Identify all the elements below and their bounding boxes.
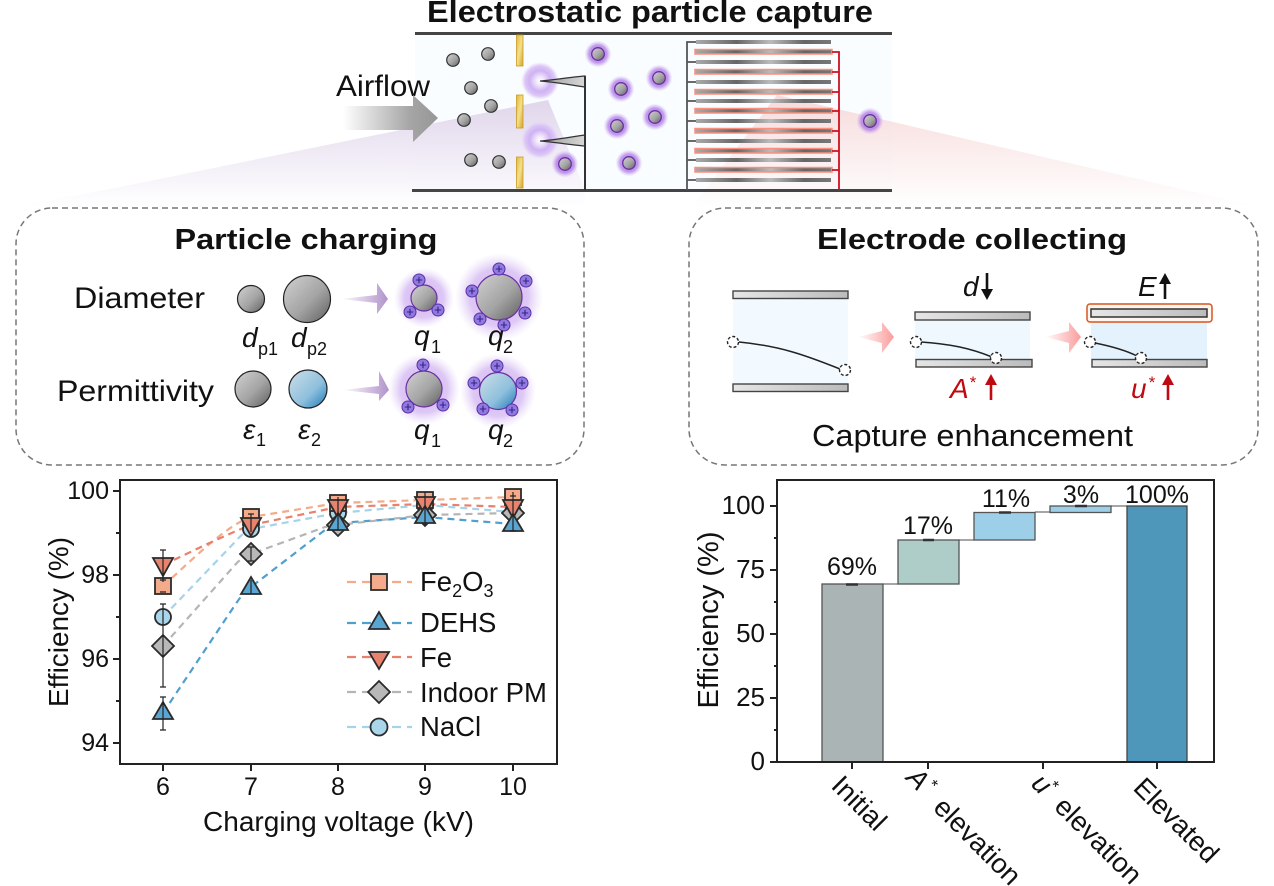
y tick labels: 50: [736, 618, 765, 648]
charged particle q1 diameter: [394, 268, 454, 328]
legend: Fe2O3: O: [462, 566, 484, 597]
legend: DEHS: [347, 607, 496, 638]
y tick labels: 98: [81, 561, 109, 589]
legend: NaCl: [347, 711, 481, 742]
heading: Particle charging: [174, 224, 438, 256]
series: Fe markers: [153, 497, 523, 576]
value labels: 69%: [827, 553, 877, 581]
legend: NaCl: NaCl: [420, 711, 481, 742]
category labels: Initial: [826, 769, 893, 837]
labels d_p1 d_p2: [242, 322, 327, 359]
labels epsilon: 2: [311, 430, 321, 450]
category labels: u: [1026, 767, 1058, 800]
label: d decrease: [963, 271, 993, 302]
value labels: 3%: [1063, 481, 1099, 509]
duct background: [415, 34, 892, 190]
series: Indoor PM markers: [152, 502, 524, 657]
category labels: *: [1044, 776, 1063, 795]
legend: Fe: [347, 642, 452, 673]
value labels: 17%: [903, 512, 953, 540]
y tick labels: [722, 490, 765, 776]
airflow label: Airflow: [336, 70, 430, 103]
labels q1 q2 row one: q: [414, 320, 430, 351]
bar: A* elevation 17%: [898, 540, 959, 584]
discharge needles: [540, 76, 585, 190]
collector grounded plates: [687, 40, 831, 190]
charged particles: [552, 40, 884, 178]
labels q1 q2 row two: [414, 414, 513, 451]
labels q1 q2 row one: [414, 320, 513, 357]
value labels: 100%: [1125, 481, 1189, 509]
row label: permittivity: Permittivity: [57, 375, 214, 408]
legend: Fe2O3: 2: [452, 581, 462, 601]
labels d_p1 d_p2: p1: [258, 339, 278, 359]
particles of differing permittivity: [235, 370, 327, 408]
label: A star increase: A: [948, 373, 969, 404]
y tick labels: 25: [736, 682, 765, 712]
x tick labels: 10: [499, 773, 527, 801]
labels epsilon: 1: [256, 430, 266, 450]
charged particle q2 permittivity: [460, 353, 536, 429]
plot frame and ticks: [770, 480, 1214, 769]
panel frame: [689, 208, 1258, 465]
legend: Fe2O3: Fe: [420, 566, 452, 597]
x tick labels: [156, 773, 527, 801]
x tick labels: 7: [244, 773, 258, 801]
labels q1 q2 row two: 2: [503, 431, 513, 451]
waterfall chart: capture efficiency: [693, 480, 1225, 886]
x tick labels: 8: [331, 773, 345, 801]
legend: Fe: Fe: [420, 642, 452, 673]
legend: [347, 566, 547, 742]
bar: u* elevation 3%: [1050, 506, 1111, 512]
panel frame: [16, 208, 584, 465]
labels d_p1 d_p2: d: [242, 322, 259, 353]
x axis title: Charging voltage (kV): [203, 806, 474, 837]
caption: Capture enhancement: [812, 418, 1133, 453]
label: A star increase: [948, 373, 997, 404]
labels q1 q2 row two: q: [488, 414, 504, 445]
value labels: [827, 481, 1189, 581]
labels epsilon: [243, 414, 321, 450]
stage three: raised field: [1084, 304, 1212, 367]
label: E increase: E: [1138, 271, 1157, 302]
error caps: [846, 506, 1087, 584]
panel: particle charging: [16, 208, 584, 465]
category labels: Elevated: [1128, 771, 1225, 869]
stage one: initial electrodes: [728, 291, 850, 392]
label: u star increase: *: [1148, 373, 1156, 392]
y axis title: Efficiency (%): [43, 537, 74, 707]
label: A star increase: *: [969, 373, 977, 392]
stage two: narrowed spacing: [910, 312, 1032, 367]
bar: initial 69%: [822, 584, 883, 762]
series: NaCl markers: [155, 497, 521, 625]
legend: Indoor PM: [347, 677, 547, 708]
shaded fan: charging zoom: [16, 100, 585, 207]
legend: DEHS: DEHS: [420, 607, 496, 638]
y tick labels: 96: [81, 645, 109, 673]
category labels: *: [923, 775, 942, 794]
shaded fan: collecting zoom: [692, 95, 1250, 207]
series: DEHS markers: [153, 506, 523, 719]
series: Fe2O3 markers: [155, 489, 521, 594]
legend: Indoor PM: Indoor PM: [420, 677, 547, 708]
duct walls: [412, 32, 892, 192]
row label: diameter: Diameter: [74, 282, 205, 315]
label: u star increase: u: [1131, 373, 1147, 404]
plot frame and ticks: [113, 480, 557, 771]
gold mesh plates: [516, 35, 523, 188]
y tick labels: 75: [736, 554, 765, 584]
heading: Electrode collecting: [817, 224, 1127, 256]
labels d_p1 d_p2: p2: [307, 339, 327, 359]
labels epsilon: ε: [243, 414, 256, 445]
arrow: diameter charging: [340, 283, 388, 314]
collector charged plates: [695, 50, 839, 190]
y axis title: Efficiency (%): [693, 532, 725, 708]
label: u star increase: [1131, 373, 1174, 404]
neutral particles: [447, 48, 505, 168]
labels d_p1 d_p2: d: [291, 322, 308, 353]
y tick labels: 0: [751, 746, 765, 776]
label: E increase: [1138, 271, 1171, 302]
labels q1 q2 row two: 1: [431, 431, 441, 451]
y tick labels: 94: [81, 729, 109, 757]
arrow: stage two to three: [1045, 322, 1081, 353]
dashed series lines: [163, 497, 513, 713]
arrow: permittivity charging: [342, 371, 389, 401]
labels q1 q2 row one: 2: [503, 337, 513, 357]
small and large neutral particles: [238, 276, 330, 322]
x tick labels: 6: [156, 773, 170, 801]
category labels: A: [899, 760, 936, 796]
error bars: [160, 492, 516, 730]
arrow: stage one to two: [858, 322, 894, 353]
labels q1 q2 row one: 1: [431, 337, 441, 357]
labels q1 q2 row two: q: [414, 414, 430, 445]
line chart: efficiency vs charging voltage: [43, 477, 557, 837]
connector lines: [883, 506, 1127, 584]
y tick labels: 100: [67, 477, 109, 505]
panel: electrode collecting: [689, 208, 1258, 465]
charged particle q1 permittivity: [388, 353, 460, 425]
bar: intermediate 11%: [974, 512, 1035, 540]
corona discharge glow: [521, 62, 559, 159]
labels epsilon: ε: [298, 414, 311, 445]
charged particle q2 diameter: [455, 253, 543, 341]
legend: Fe2O3: [347, 566, 494, 601]
value labels: 11%: [982, 485, 1030, 513]
y tick labels: 100: [722, 490, 765, 520]
panel: electrostatic precipitator schematic: [336, 32, 892, 192]
category labels: [826, 760, 1225, 886]
arrow: airflow: [343, 95, 438, 142]
legend: Fe2O3: 3: [484, 581, 494, 601]
x tick labels: 9: [418, 773, 432, 801]
y tick labels: [67, 477, 109, 757]
bar: elevated 100%: [1127, 506, 1187, 762]
label: d decrease: d: [963, 271, 980, 302]
labels q1 q2 row one: q: [488, 320, 504, 351]
